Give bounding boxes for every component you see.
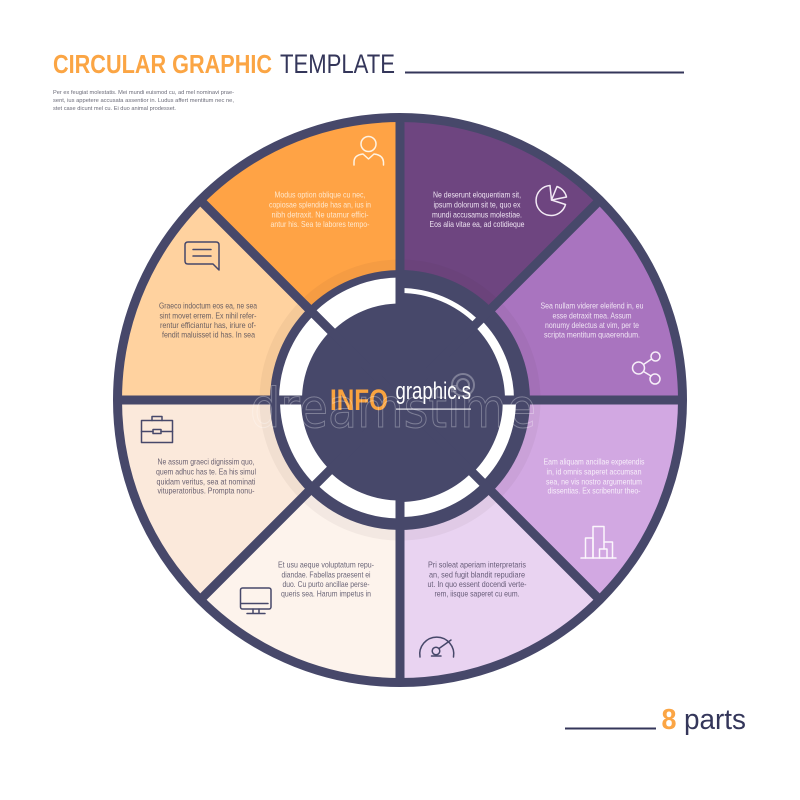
text: segment 4: ut. In quo essent docendi verte- xyxy=(428,579,527,589)
outer ring xyxy=(118,118,682,682)
text: segment 3: Eam aliquam ancillae expetendis xyxy=(544,456,644,466)
panel: segment 4 lightest purple xyxy=(400,400,600,683)
text: segment 8 xyxy=(269,190,371,229)
center label xyxy=(330,378,471,417)
text: segment 8: nibh detraxit. Ne utamur effici- xyxy=(272,210,369,220)
panel: segment 6 pale peach xyxy=(117,400,400,600)
center label: INFO xyxy=(330,384,388,417)
text: segment 4: Pri soleat aperiam interpretaris xyxy=(428,560,526,570)
text: segment 3: in, id omnis saperet accumsan xyxy=(546,466,642,476)
text: segment 6: quidam veritus, sea at nominati xyxy=(156,476,256,486)
text: segment 1: ipsum dolorum sit te, quo ex xyxy=(434,200,521,210)
watermark: dreamstime xyxy=(250,377,536,440)
text: segment 2: Sea nullam viderer eleifend in, eu xyxy=(540,300,644,310)
ring segments xyxy=(290,290,510,510)
text: segment 8: copiosae splendide has an, ius in xyxy=(269,200,371,210)
text: segment 6 xyxy=(156,456,256,496)
text: segment 5: queris sea. Harum impetus in xyxy=(281,588,371,598)
text: segment 1: mundi accusamus molestiae. xyxy=(432,210,522,220)
text: segment 3: dissentias. Ex scribentur theo- xyxy=(548,486,641,496)
text: segment 4: an, sed fugit blandit repudiare xyxy=(429,570,525,580)
text: segment 7: rentur efficiantur has, iriure of- xyxy=(160,320,256,330)
panel: segment 7 peach xyxy=(117,200,400,400)
text: segment 4: rem, iisque saperet cu eum. xyxy=(434,588,520,598)
panel: segment 1 dark purple xyxy=(400,117,600,400)
panel: segment 8 orange xyxy=(200,117,400,400)
text: segment 3: sea, ne vis nostro argumentum xyxy=(546,476,642,486)
title: TEMPLATE xyxy=(280,49,395,79)
text: segment 7: Graeco indoctum eos ea, ne sea xyxy=(159,300,257,310)
text: segment 5 xyxy=(278,560,374,598)
title xyxy=(53,49,684,79)
text: segment 4 xyxy=(428,560,527,598)
text: segment 2: nonumy delectus at vim, per te xyxy=(545,320,639,330)
panel: segment 2 purple xyxy=(400,200,683,400)
text: segment 6: Ne assum graeci dignissim quo, xyxy=(158,456,254,466)
text: segment 1: Ne deserunt eloquentiam sit, xyxy=(433,190,521,200)
icon: speech bubble xyxy=(185,242,219,270)
panel: segment 5 cream xyxy=(200,400,400,683)
text: segment 2 xyxy=(540,300,644,340)
footer label: 8 parts: parts xyxy=(684,704,746,736)
text: segment 5: diandae. Fabellas praesent ei xyxy=(282,570,371,580)
text: segment 7 xyxy=(159,300,257,340)
icon: gauge xyxy=(420,637,454,657)
text: segment 5: Et usu aeque voluptatum repu- xyxy=(278,560,374,570)
text: segment 7: sint movet errem. Ex nihil refer- xyxy=(160,310,257,320)
text: segment 5: duo. Cu purto ancillae perse- xyxy=(282,579,370,589)
intro text: sent, ius appetere accusata assentior in. Ludus affert mentitum nec ne, xyxy=(53,98,234,104)
icon: person xyxy=(354,136,384,165)
text: segment 6: quem adhuc has te. Ea his simul xyxy=(156,466,256,476)
text: segment 2: esse detraxit mea. Assum xyxy=(552,310,632,320)
icon: briefcase xyxy=(142,416,172,442)
text: segment 7: fendit maluisset id has. In sea xyxy=(162,330,255,340)
icon: buildings xyxy=(581,526,616,558)
center label: graphic.s xyxy=(396,378,471,405)
text: segment 6: vituperatoribus. Prompta nonu- xyxy=(158,486,255,496)
text: segment 3 xyxy=(544,456,644,496)
footer label: 8 parts: 8 xyxy=(662,704,676,736)
spokes xyxy=(118,118,682,682)
icon: share nodes xyxy=(632,352,660,384)
title: CIRCULAR GRAPHIC xyxy=(53,49,272,79)
hub xyxy=(265,265,535,535)
text: segment 1 xyxy=(430,190,525,229)
intro text: stet case dicunt mel cu. Ei duo animal prodesset. xyxy=(53,106,176,112)
text: segment 8: Modus option oblique cu nec, xyxy=(274,190,366,200)
text: segment 8: antur his. Sea te labores tempo- xyxy=(270,219,370,229)
icon: pie chart xyxy=(536,186,566,215)
footer label: 8 parts xyxy=(565,704,746,736)
intro text xyxy=(53,90,234,112)
icon: monitor xyxy=(240,588,271,614)
panel: segment 3 light purple xyxy=(400,400,683,600)
text: segment 2: scripta mentitum quaerendum. xyxy=(544,330,640,340)
text: segment 1: Eos alia vitae ea, ad cotidieque xyxy=(430,219,525,229)
intro text: Per ex feugiat molestatis. Mei mundi euismod cu, ad mel nominavi prae- xyxy=(53,90,234,96)
